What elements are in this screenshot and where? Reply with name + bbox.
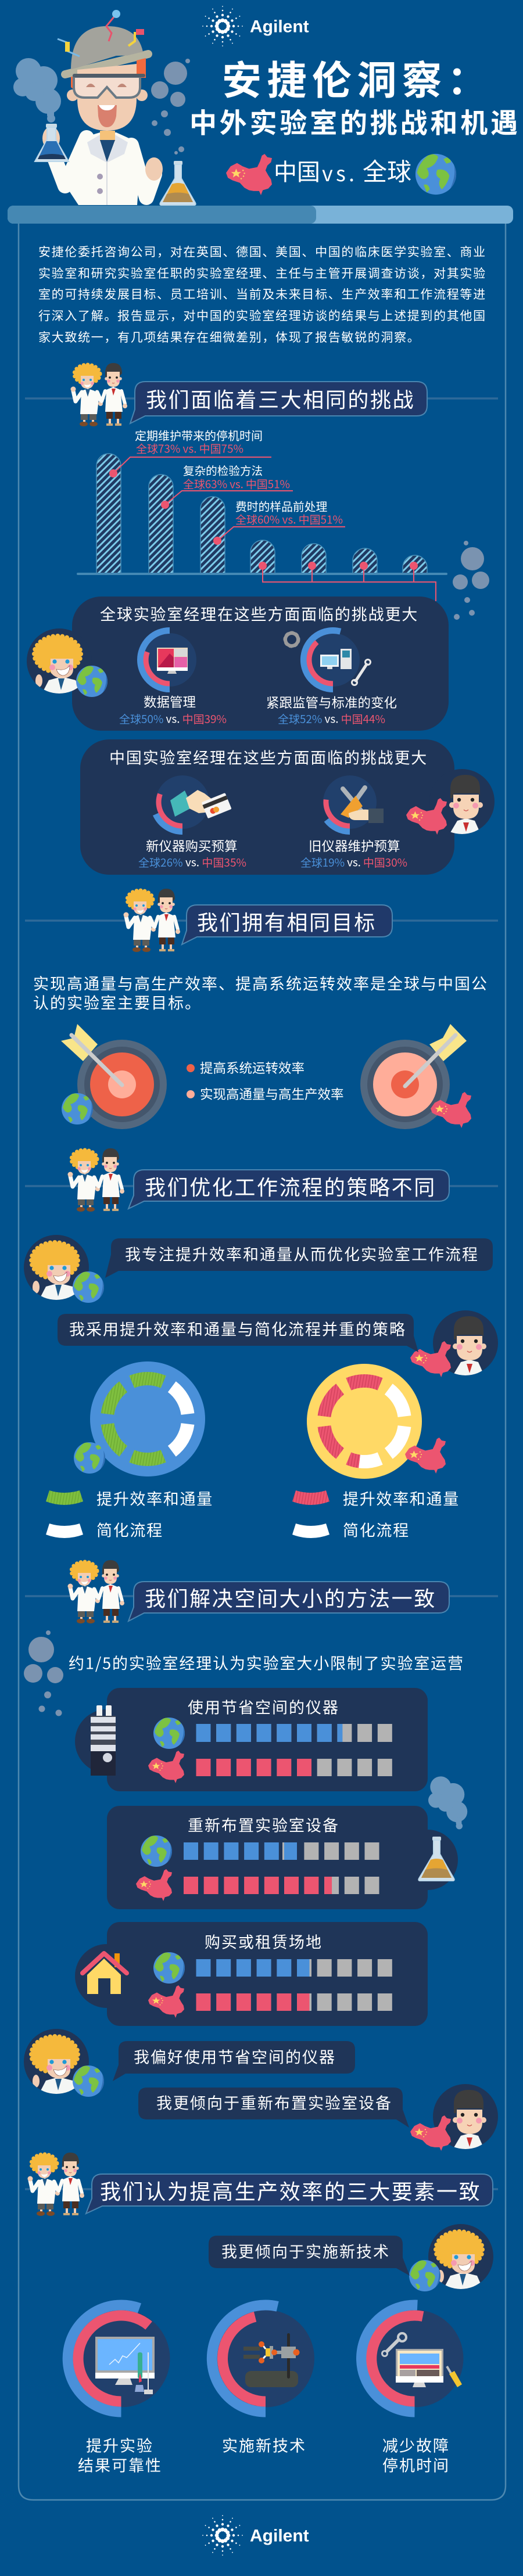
- section heading 5: [25, 2153, 498, 2216]
- bars: China 59%: [196, 1993, 392, 2011]
- bar chart: challenges: [77, 454, 447, 601]
- bar label 3: 费时的样品前处理: [235, 497, 327, 515]
- panel: space-saving instruments: [75, 1688, 428, 1791]
- bar label 3: 全球60% vs. 中国51%: [235, 511, 343, 527]
- icon: monitor and tools: [382, 2333, 462, 2387]
- donut: data management: [140, 631, 196, 689]
- target: China: [360, 1024, 471, 1129]
- section heading 3: [25, 1148, 498, 1212]
- target legend: 提高系统运转效率: [200, 1058, 305, 1077]
- speech: global manager on space: 我偏好使用节省空间的仪器: [134, 2045, 336, 2068]
- panel: China managers' bigger challenges: 新仪器购买预算: [146, 836, 238, 855]
- bars: China 75%: [184, 1877, 379, 1894]
- legend: global strategy: 简化流程: [96, 1518, 163, 1540]
- donut label 3: 停机时间: [382, 2453, 450, 2476]
- panel: global managers' bigger challenges: 数据管理: [144, 692, 196, 711]
- icon: house: [83, 1953, 127, 1994]
- target legend: 实现高通量与高生产效率: [200, 1084, 344, 1103]
- subtitle: China vs. Global: vs.: [322, 157, 354, 188]
- bars: global 59%: [196, 1959, 392, 1977]
- donut: result reliability: [68, 2305, 170, 2412]
- section heading 5: 我们认为提高生产效率的三大要素一致: [100, 2175, 481, 2205]
- bars: global 73%: [196, 1724, 392, 1742]
- donut label 1: 提升实验: [86, 2434, 153, 2456]
- icon: monitor and burner: [95, 2337, 155, 2394]
- intro text: [38, 243, 486, 346]
- donut: new instrument budget: [156, 775, 232, 832]
- bar label 1: 全球73% vs. 中国75%: [136, 440, 243, 457]
- intro text: 家大致统一，有几项结果存在细微差别，体现了报告敏锐的洞察。: [38, 328, 420, 346]
- subtitle: China vs. Global: 中国: [274, 153, 320, 187]
- panel: China managers' bigger challenges: 中国实验室经理在这些方面面临的挑战更大: [109, 746, 428, 768]
- section heading 3: 我们优化工作流程的策略不同: [145, 1171, 436, 1201]
- scientist illustration: [35, 10, 196, 205]
- bar label 3: [235, 497, 343, 527]
- lab bench: [8, 206, 513, 224]
- portrait: global manager: [27, 628, 109, 698]
- bubbles near scientist: [151, 59, 190, 155]
- panel: global managers' bigger challenges: [27, 597, 449, 731]
- speech: China manager on workflow: 我采用提升效率和通量与简化流程并重的策略: [69, 1317, 406, 1339]
- intro text: 行深入了解。报告显示，对中国的实验室经理访谈的结果与上述提到的其他国: [38, 307, 486, 324]
- donut label 3: 减少故障: [382, 2434, 450, 2456]
- subtitle: China vs. Global: 全球: [363, 152, 411, 188]
- speech: China manager on space: [138, 2084, 498, 2151]
- section heading 4: [25, 1560, 498, 1623]
- panel: purchase or lease space: [75, 1922, 428, 2026]
- donut: implement new technology: [212, 2305, 314, 2412]
- panel: space-saving instruments: 使用节省空间的仪器: [188, 1695, 339, 1718]
- panel: purchase or lease space: 购买或租赁场地: [205, 1930, 323, 1953]
- panel: China managers' bigger challenges: 旧仪器维护预算: [309, 836, 400, 855]
- section heading 2: 我们拥有相同目标: [197, 906, 377, 936]
- bubbles left of space text: [24, 1630, 63, 1716]
- panel: China managers' bigger challenges: 全球19% vs. 中国30%: [300, 854, 407, 870]
- bar label 1: 定期维护带来的停机时间: [135, 426, 263, 444]
- panel: global managers' bigger challenges: 紧跟监管与标准的变化: [266, 693, 397, 712]
- donut label 3: [382, 2434, 450, 2476]
- donut: reduce downtime: [361, 2305, 464, 2412]
- footer logo: [202, 2515, 309, 2556]
- donut label 1: [78, 2434, 162, 2476]
- intro text: 实验室和研究实验室任职的实验室经理、主任与主管开展调查访谈，对其实验: [38, 264, 486, 282]
- header logo: Agilent: [250, 17, 309, 36]
- section heading 1: 我们面临着三大相同的挑战: [146, 383, 415, 414]
- section heading 4: 我们解决空间大小的方法一致: [145, 1582, 436, 1612]
- donut: regulation changes: [285, 631, 371, 689]
- goals paragraph: 实现高通量与高生产效率、提高系统运转效率是全球与中国公: [33, 971, 488, 994]
- title: 中外实验室的挑战和机遇: [189, 101, 521, 141]
- panel: rearrange equipment: [107, 1806, 458, 1909]
- speech: global manager on workflow: 我专注提升效率和通量从而优化实验室工作流程: [125, 1242, 479, 1265]
- bars: global 58%: [184, 1842, 379, 1860]
- donut label 1: 结果可靠性: [78, 2453, 162, 2476]
- ring chart: global workflow strategy: [74, 1361, 205, 1476]
- panel: global managers' bigger challenges: 全球实验室经理在这些方面面临的挑战更大: [100, 602, 418, 625]
- legend: global strategy: 提升效率和通量: [96, 1487, 213, 1509]
- portrait: China manager: [406, 769, 495, 836]
- ring chart: China workflow strategy: [307, 1364, 446, 1479]
- legend: China strategy: 简化流程: [343, 1518, 410, 1540]
- donut label 2: 实施新技术: [222, 2434, 306, 2456]
- panel: global managers' bigger challenges: 全球52% vs. 中国44%: [278, 711, 385, 726]
- smoke near panel 2: [428, 1776, 467, 1829]
- bar label 2: 全球63% vs. 中国51%: [183, 476, 290, 491]
- space statement: 约1/5的实验室经理认为实验室大小限制了实验室运营: [69, 1651, 463, 1674]
- donut: old instrument maintenance budget: [323, 775, 384, 832]
- title: [189, 49, 521, 141]
- icon: robotic arm: [243, 2333, 300, 2387]
- title: 安捷伦洞察：: [222, 49, 492, 106]
- speech: global manager on space: [24, 2029, 355, 2097]
- speech: China manager on space: 我更倾向于重新布置实验室设备: [156, 2091, 392, 2113]
- bar label 1: [135, 426, 263, 457]
- speech: new technology: [209, 2224, 493, 2292]
- intro text: 安捷伦委托咨询公司，对在英国、德国、美国、中国的临床医学实验室、商业: [38, 243, 486, 260]
- target: global: [61, 1024, 167, 1129]
- bar label 2: [183, 461, 290, 491]
- subtitle: China vs. Global: [226, 152, 458, 195]
- speech: China manager on workflow: [58, 1310, 498, 1378]
- bubbles right of chart: [453, 541, 489, 620]
- target legend: [187, 1058, 344, 1103]
- speech: new technology: 我更倾向于实施新技术: [221, 2240, 390, 2262]
- section heading 2: [25, 889, 498, 952]
- legend: China strategy: [292, 1487, 460, 1540]
- legend: global strategy: [46, 1487, 213, 1540]
- goals paragraph: [33, 971, 488, 1013]
- section heading 1: [25, 363, 498, 426]
- bars: China 60%: [196, 1759, 392, 1776]
- panel: global managers' bigger challenges: 全球50% vs. 中国39%: [119, 711, 227, 726]
- legend: China strategy: 提升效率和通量: [343, 1487, 460, 1509]
- goals paragraph: 认的实验室主要目标。: [33, 991, 202, 1013]
- intro text: 室的可持续发展目标、员工培训、当前及未来目标、生产效率和工作流程等进: [38, 285, 486, 303]
- panel: rearrange equipment: 重新布置实验室设备: [188, 1813, 339, 1835]
- speech: global manager on workflow: [24, 1235, 493, 1303]
- smoke cloud: [13, 58, 61, 123]
- header logo: [202, 6, 309, 46]
- panel: China managers' bigger challenges: [80, 739, 495, 875]
- panel: China managers' bigger challenges: 全球26% vs. 中国35%: [138, 854, 246, 870]
- footer logo: Agilent: [250, 2527, 309, 2545]
- bar label 2: 复杂的检验方法: [183, 461, 263, 479]
- icon: instrument: [91, 1705, 116, 1776]
